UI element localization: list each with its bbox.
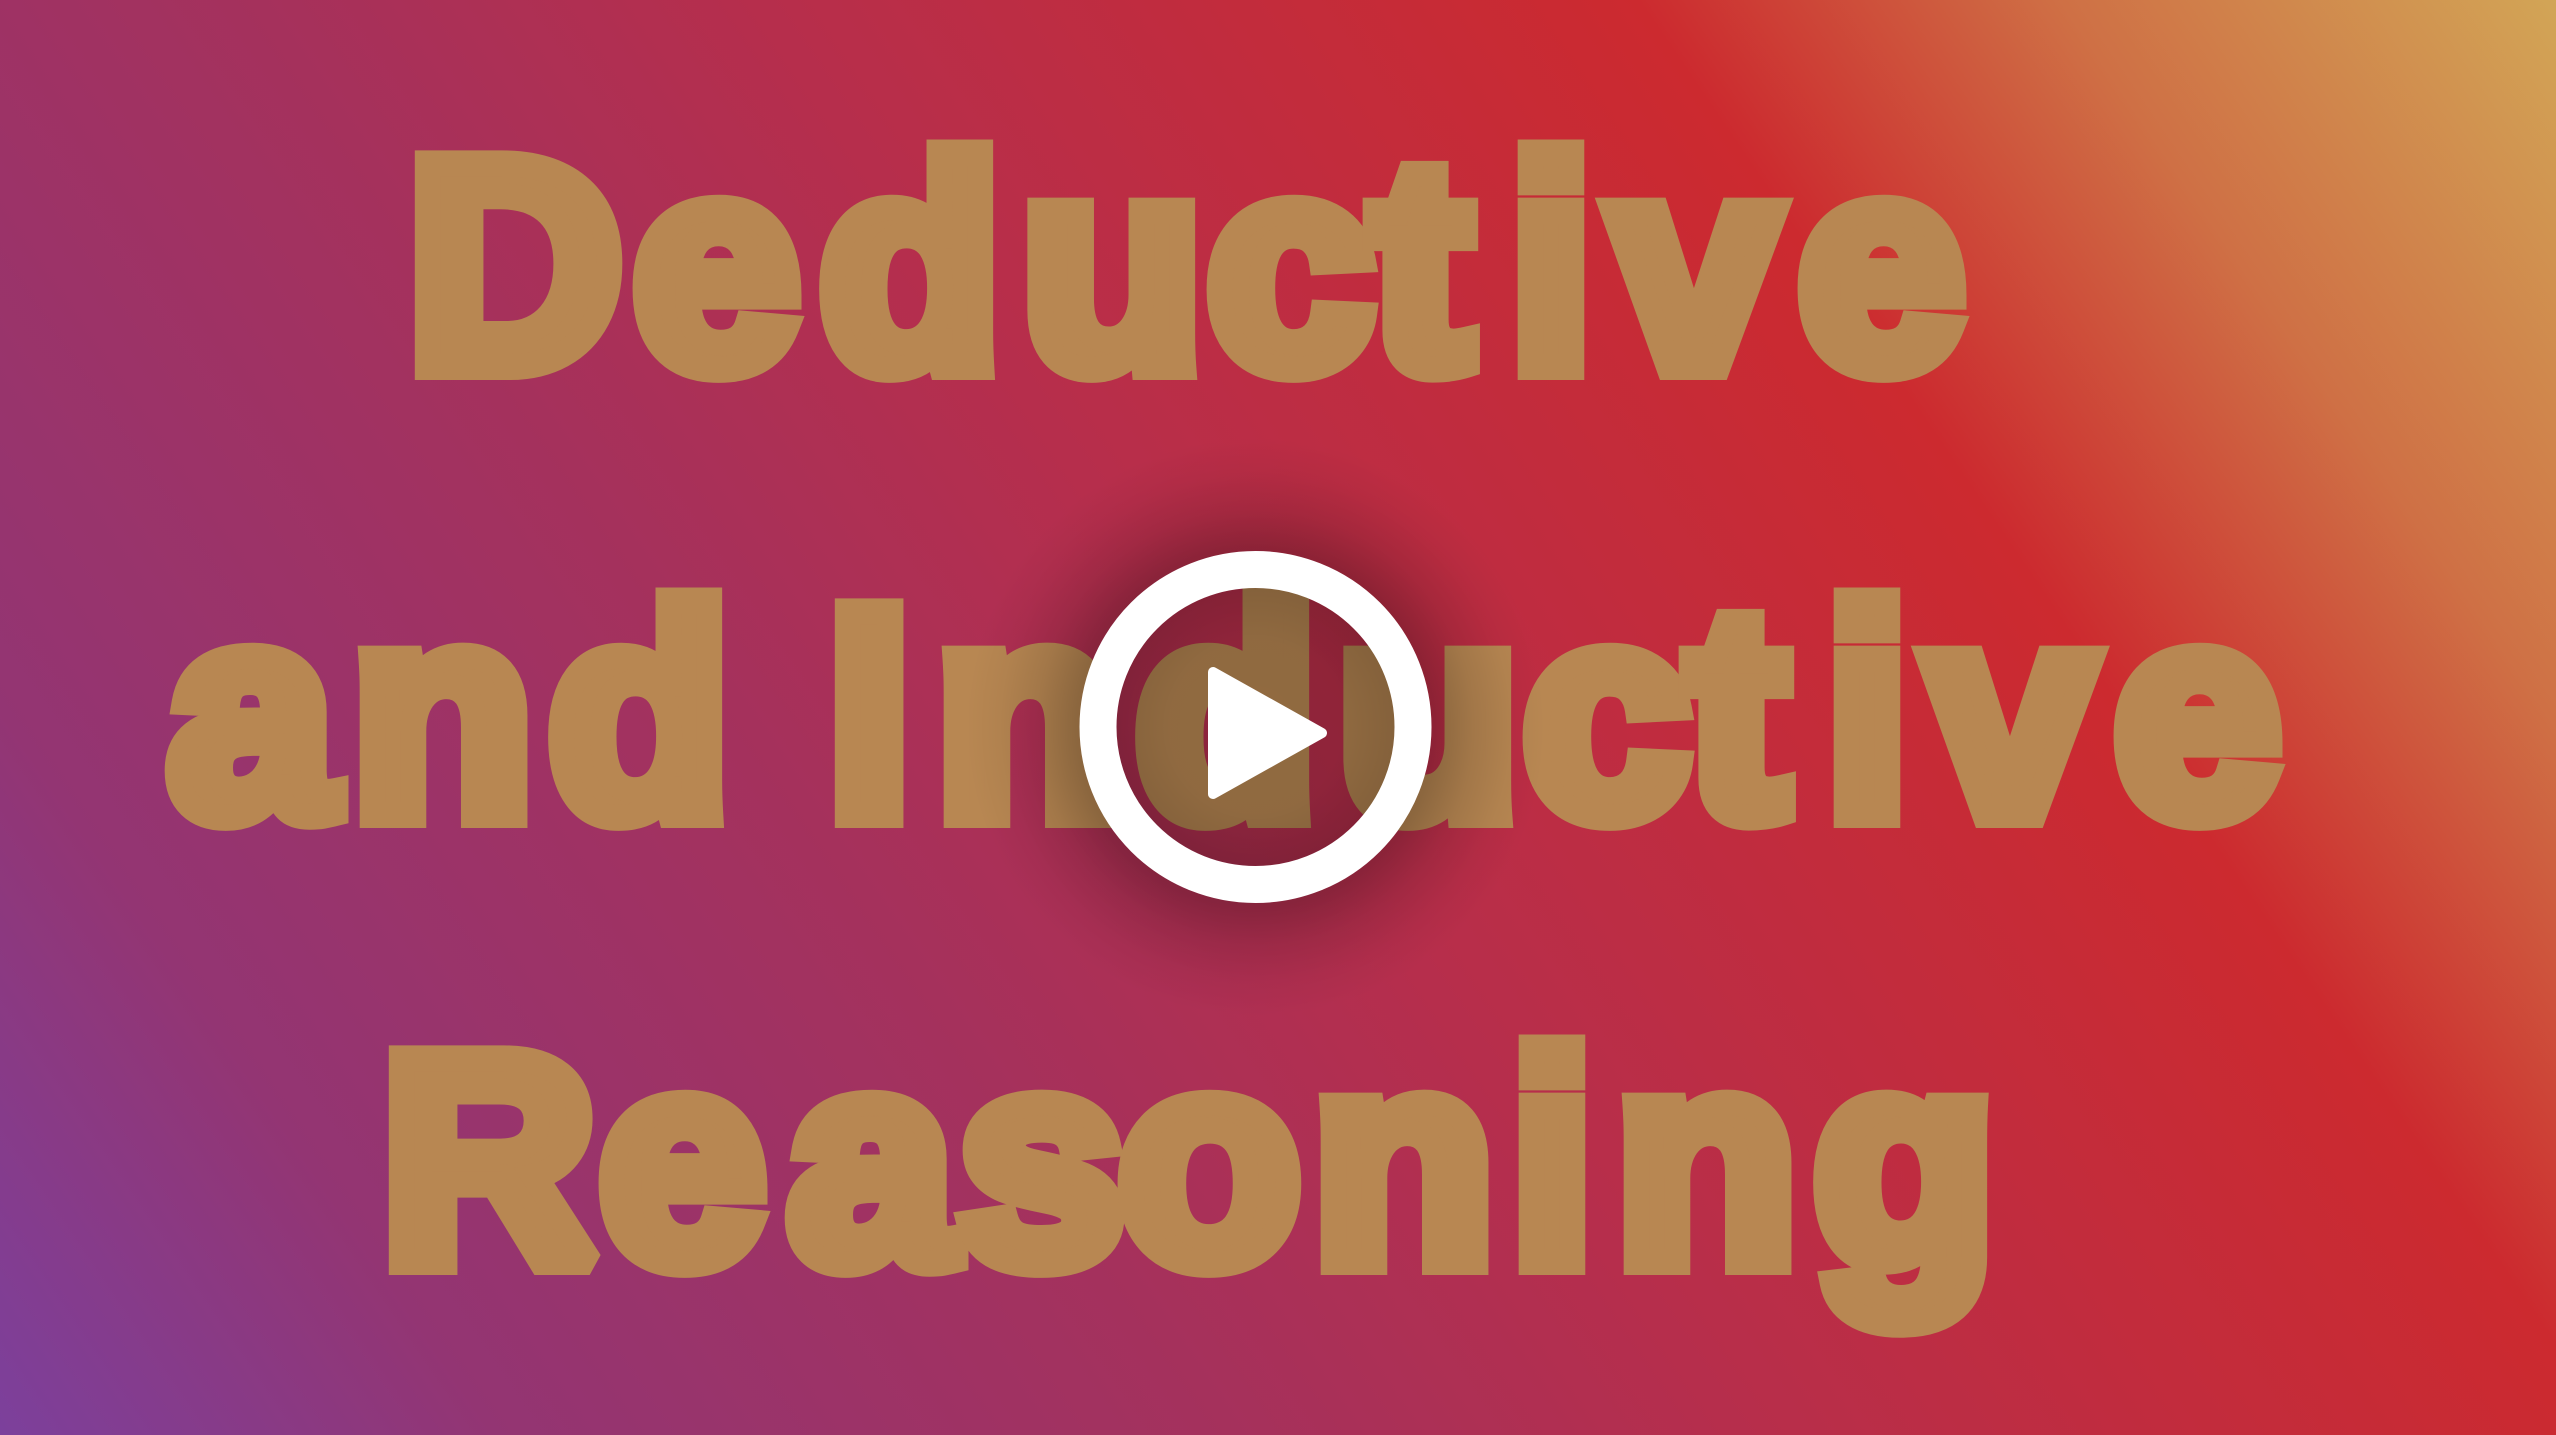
title line 1: Deductive — [408, 99, 1964, 430]
title line 2: and Inductive — [169, 547, 2280, 878]
title — [169, 99, 2280, 1327]
title line 3: Reasoning — [382, 994, 1995, 1327]
icon: play button — [966, 437, 1546, 1017]
